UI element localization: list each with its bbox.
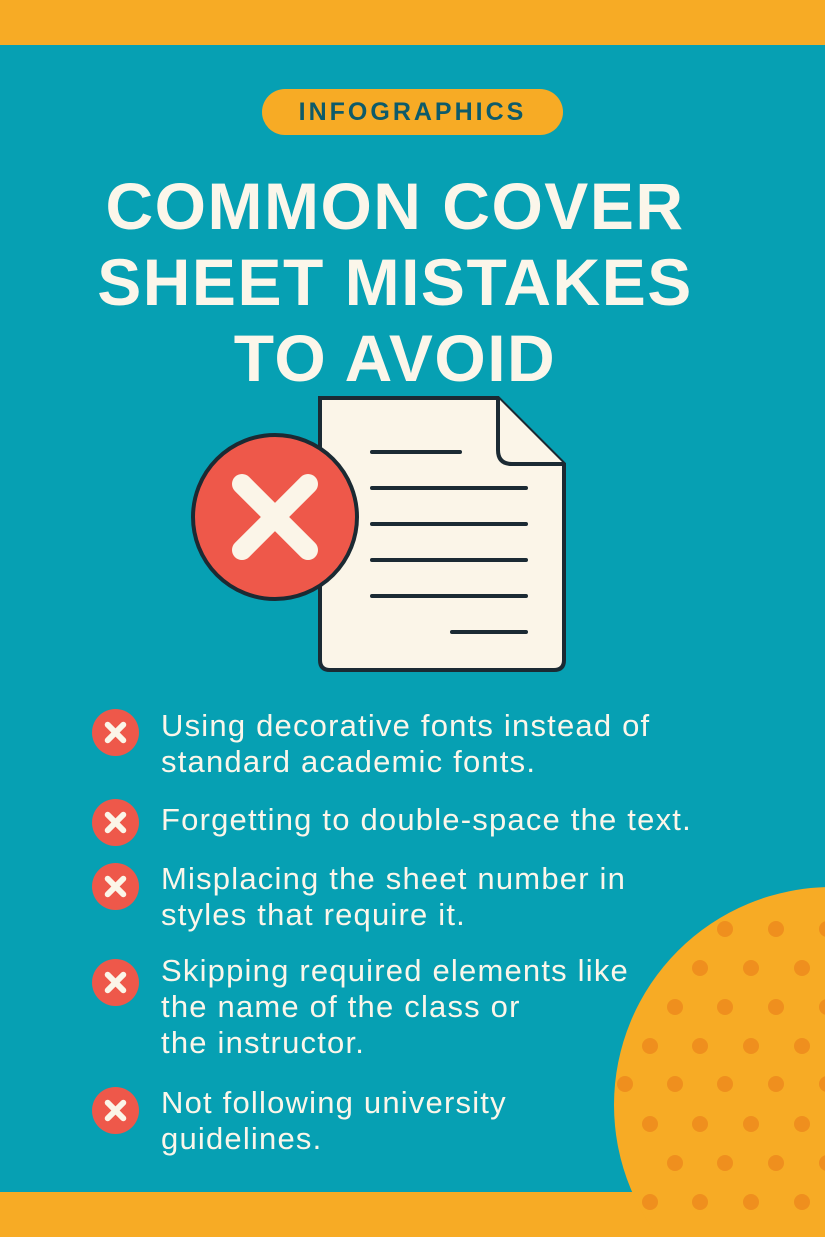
- list item 4: the name of the class or: [161, 989, 521, 1024]
- list item 3: styles that require it.: [161, 897, 466, 932]
- list item 4: [92, 953, 629, 1060]
- list item 3: Misplacing the sheet number in: [161, 861, 626, 896]
- tag: infographics: INFOGRAPHICS: [299, 98, 526, 126]
- list item 1: Using decorative fonts instead of: [161, 708, 650, 743]
- icon: x: [92, 799, 139, 846]
- tag: infographics: [262, 89, 563, 135]
- list item 4: Skipping required elements like: [161, 953, 629, 988]
- list item 5: [92, 1085, 507, 1156]
- list item 1: standard academic fonts.: [161, 744, 536, 779]
- list item 1: [92, 708, 650, 779]
- list item 5: Not following university: [161, 1085, 507, 1120]
- icon: x: [92, 863, 139, 910]
- title: TO AVOID: [234, 321, 556, 395]
- icon: document with red X: [191, 396, 566, 672]
- list item 2: Forgetting to double-space the text.: [161, 802, 692, 837]
- icon: x: [92, 709, 139, 756]
- list item 2: [92, 799, 692, 846]
- title: COMMON COVER: [106, 169, 684, 243]
- title: [97, 169, 693, 395]
- list item 3: [92, 861, 626, 932]
- title: SHEET MISTAKES: [97, 245, 693, 319]
- list item 5: guidelines.: [161, 1121, 322, 1156]
- icon: x: [92, 1087, 139, 1134]
- icon: x: [92, 959, 139, 1006]
- list item 4: the instructor.: [161, 1025, 365, 1060]
